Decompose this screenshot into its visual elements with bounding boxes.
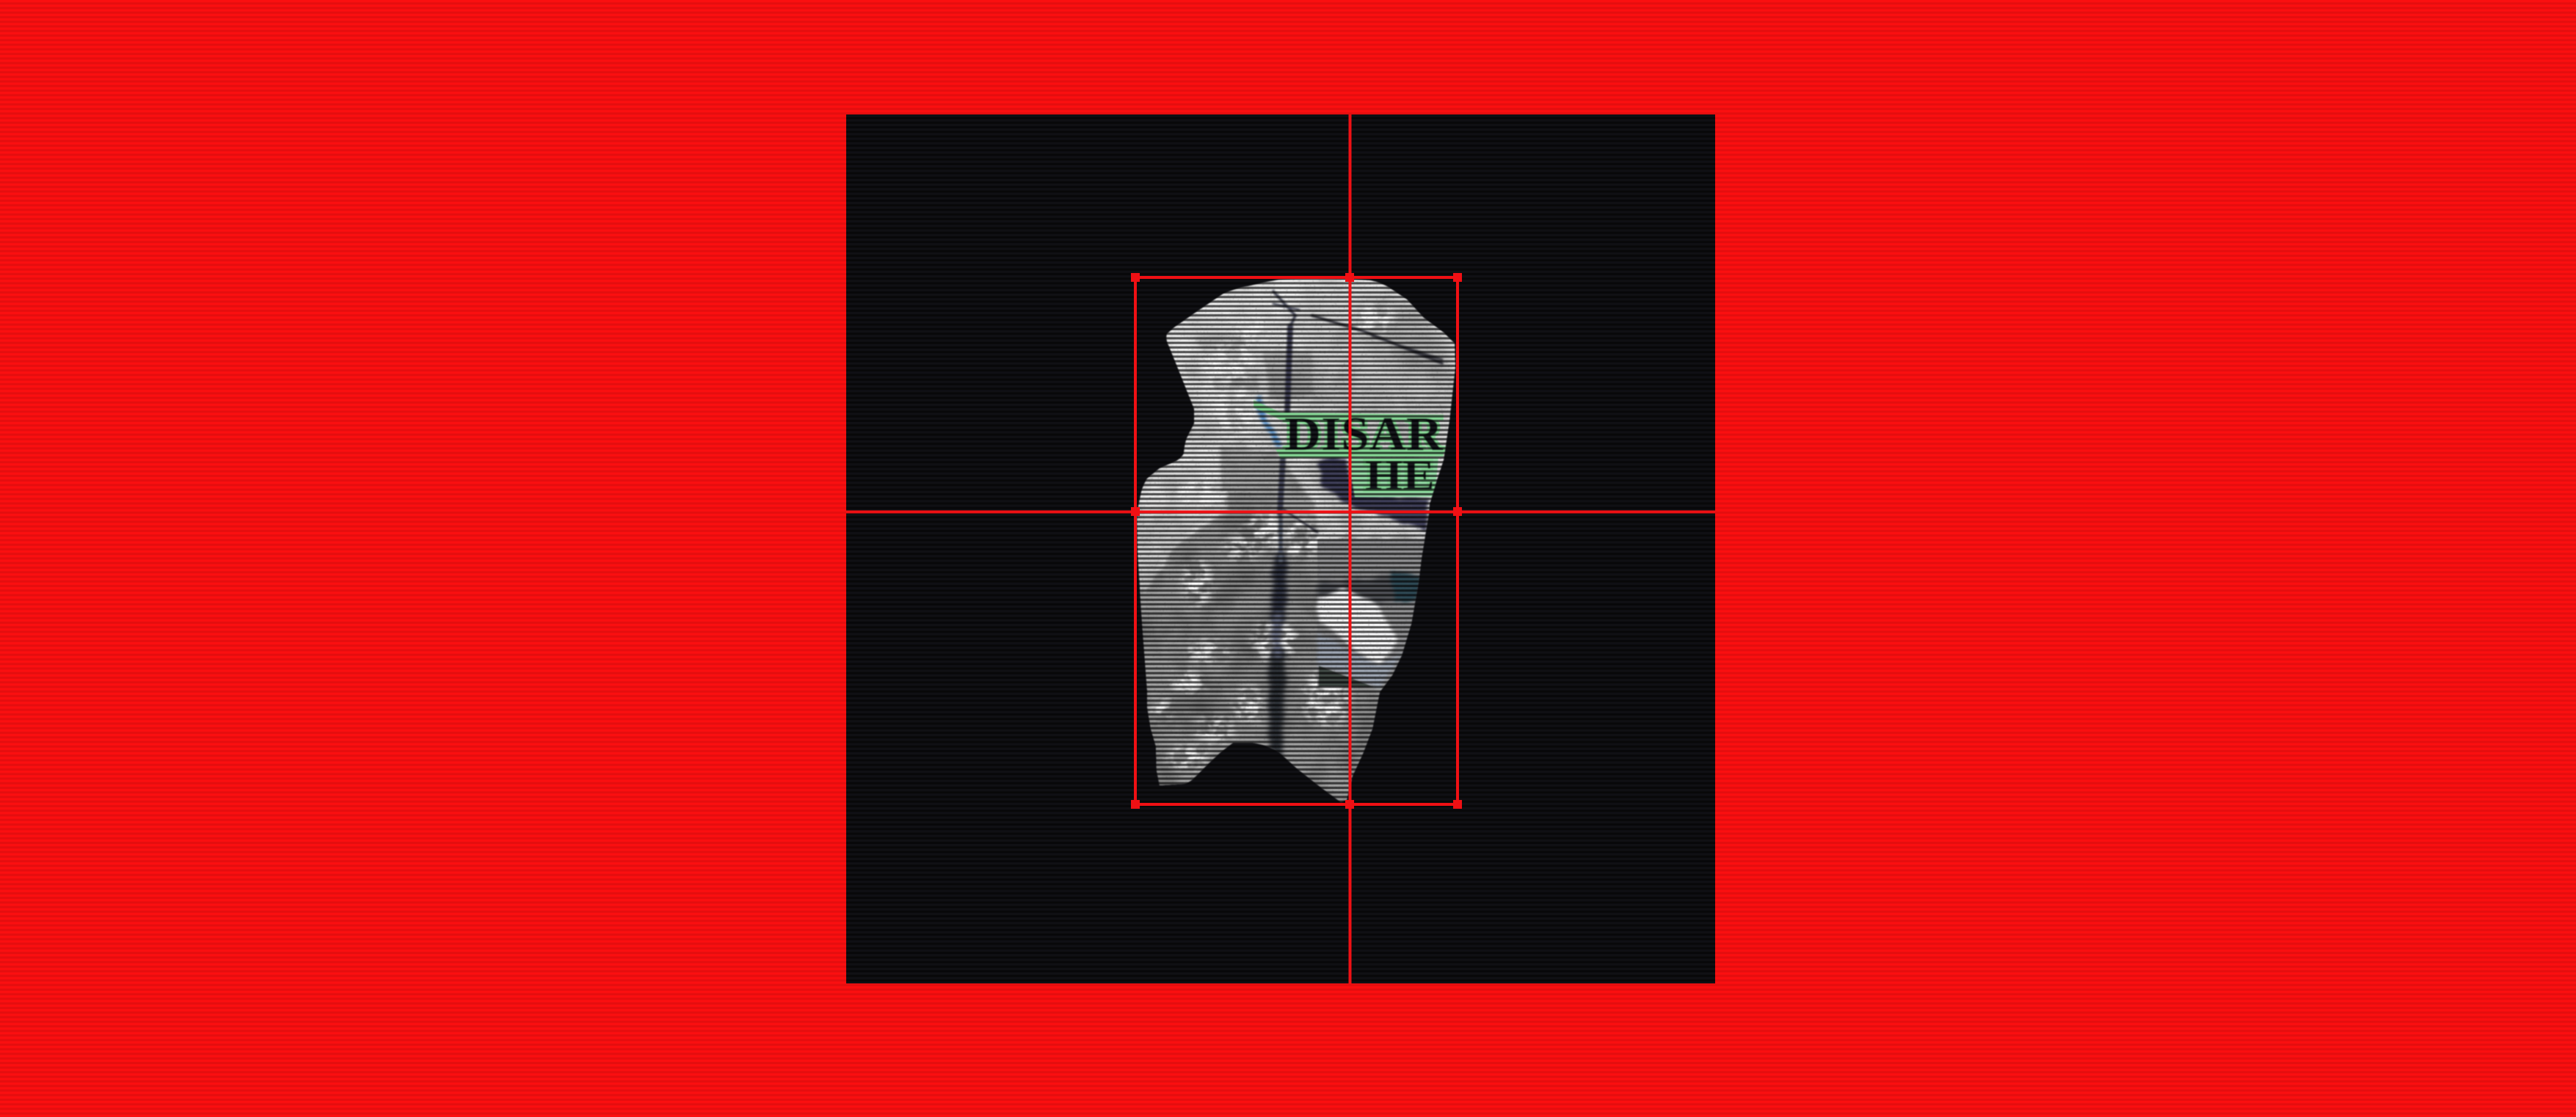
inset blue-grey lower <box>1317 631 1402 688</box>
inset white shape <box>1317 589 1398 664</box>
word DISAR: DISAR <box>1284 407 1444 461</box>
selection rectangle <box>1135 277 1458 804</box>
dark navy shadow <box>1319 457 1430 531</box>
green rails <box>1254 400 1444 458</box>
inset grey field <box>1317 539 1424 687</box>
top light lift <box>1167 279 1455 456</box>
inset teal shadow <box>1391 571 1427 602</box>
corner and edge handles <box>1131 273 1462 809</box>
black square panel <box>846 114 1715 983</box>
light outer edge <box>1137 506 1218 594</box>
green graffiti banner <box>1254 400 1444 499</box>
dark grain patch top right <box>1358 294 1449 389</box>
inset photo fragment <box>1314 539 1424 688</box>
inset dark band <box>1314 573 1399 604</box>
object scanlines <box>1130 275 1460 807</box>
grey patches <box>1195 335 1317 511</box>
lower green panel <box>1349 458 1438 497</box>
dark centre seam <box>1273 291 1442 752</box>
grey upper right surface <box>1303 286 1460 448</box>
crosshair lines <box>846 114 1715 983</box>
object base surface <box>1130 275 1460 807</box>
inset dark triangle <box>1319 666 1374 687</box>
grain texture <box>1130 275 1460 807</box>
graffiti text <box>1282 417 1446 492</box>
tonal mottling <box>1130 275 1460 807</box>
grey lower body <box>1137 506 1438 807</box>
bounding box overlay <box>846 114 1715 983</box>
scanned object <box>1130 275 1460 807</box>
blue paint stroke <box>1258 396 1281 448</box>
white highlights <box>1151 305 1394 768</box>
word HE: HE <box>1365 451 1435 499</box>
